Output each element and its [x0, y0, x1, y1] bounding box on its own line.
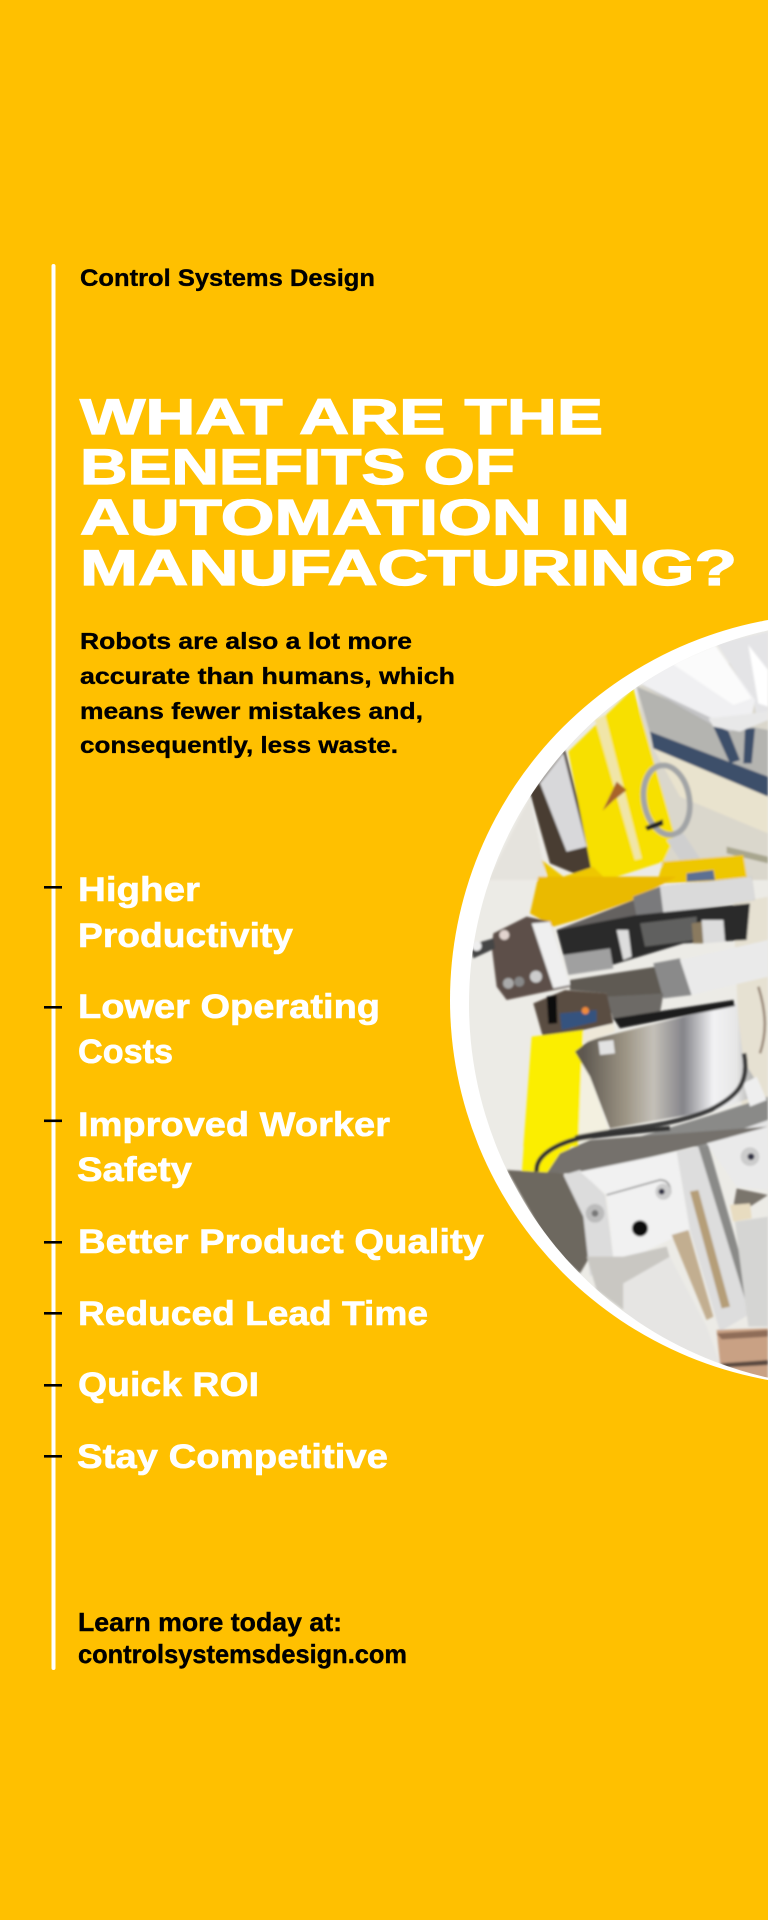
title: BENEFITS OF [80, 439, 515, 495]
benefits list: Higher [78, 871, 200, 909]
benefit ticks [44, 886, 62, 1458]
title: WHAT ARE THE [80, 389, 603, 445]
benefits list: Reduced Lead Time [78, 1295, 428, 1333]
intro paragraph: means fewer mistakes and, [80, 698, 423, 724]
call to action: Learn more today at: [78, 1607, 342, 1637]
benefits list: Productivity [78, 917, 293, 955]
photo: white ring [450, 614, 768, 1386]
title [80, 389, 737, 596]
benefits list: Improved Worker [78, 1106, 390, 1144]
call to action: controlsystemsdesign.com [78, 1639, 407, 1669]
intro paragraph: Robots are also a lot more [80, 628, 412, 654]
photo: robotic machinery [469, 630, 768, 1378]
intro paragraph: accurate than humans, which [80, 663, 455, 689]
benefits list: Better Product Quality [78, 1223, 484, 1261]
benefits list: Quick ROI [78, 1366, 259, 1404]
benefits list [77, 871, 484, 1476]
title: MANUFACTURING? [80, 540, 737, 596]
intro paragraph [80, 628, 455, 758]
intro paragraph: consequently, less waste. [80, 732, 398, 758]
title: AUTOMATION IN [80, 490, 630, 546]
timeline bar [52, 264, 56, 1670]
call to action [78, 1607, 407, 1669]
benefits list: Safety [77, 1151, 192, 1189]
benefits list: Stay Competitive [77, 1438, 388, 1476]
benefits list: Costs [78, 1033, 173, 1071]
benefits list: Lower Operating [78, 988, 380, 1026]
brand name: Control Systems Design [80, 265, 375, 292]
